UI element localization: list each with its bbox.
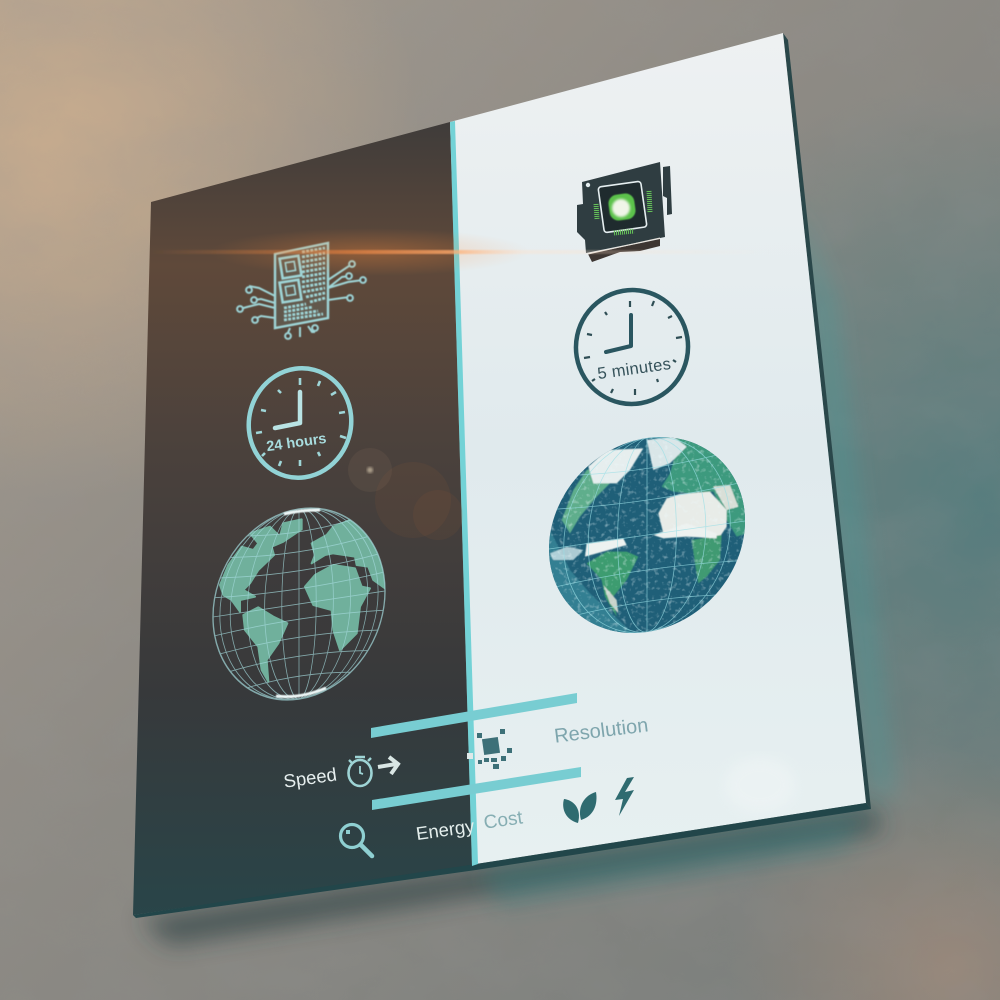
land masses — [220, 519, 385, 682]
label: Cost: Cost — [482, 807, 525, 834]
globe: low resolution wireframe — [213, 496, 385, 712]
icon: pixel cluster — [467, 729, 512, 769]
bottom edge of panel — [133, 803, 871, 918]
panel: light right side — [450, 33, 866, 864]
icon: magnifier — [340, 824, 372, 856]
orange light streak — [150, 228, 770, 276]
graticule — [213, 496, 385, 712]
continents — [549, 437, 745, 633]
icon: stopwatch — [348, 757, 372, 786]
icon: arrow right — [378, 757, 398, 774]
icon: clock 5 minutes — [565, 280, 699, 414]
comparison bar: bottom — [372, 767, 581, 810]
icon: processor chip with green core — [577, 162, 672, 262]
cloud texture — [549, 438, 744, 633]
label: Resolution: Resolution — [553, 714, 650, 748]
panel drop shadow and teal glow — [140, 200, 895, 945]
icon: circuit QR chip (left) — [237, 243, 366, 339]
label: Energy: Energy — [415, 815, 476, 844]
comparison bar: top — [371, 693, 577, 738]
panel: dark left side — [133, 122, 472, 915]
icon: clock 24 hours — [237, 357, 363, 489]
label: Speed: Speed — [282, 763, 338, 792]
icon: leaves — [563, 792, 596, 823]
lens flare ghosts — [348, 448, 463, 540]
label: 5 minutes: 5 minutes — [596, 355, 672, 383]
panel edge — [783, 33, 871, 809]
globe: high resolution satellite — [549, 437, 745, 633]
grid lines — [549, 437, 745, 633]
central divider — [450, 121, 478, 866]
label: 24 hours: 24 hours — [265, 431, 327, 455]
soft highlight on light panel — [724, 757, 796, 813]
polar highlights — [276, 510, 326, 697]
icon: lightning bolt — [615, 777, 634, 816]
